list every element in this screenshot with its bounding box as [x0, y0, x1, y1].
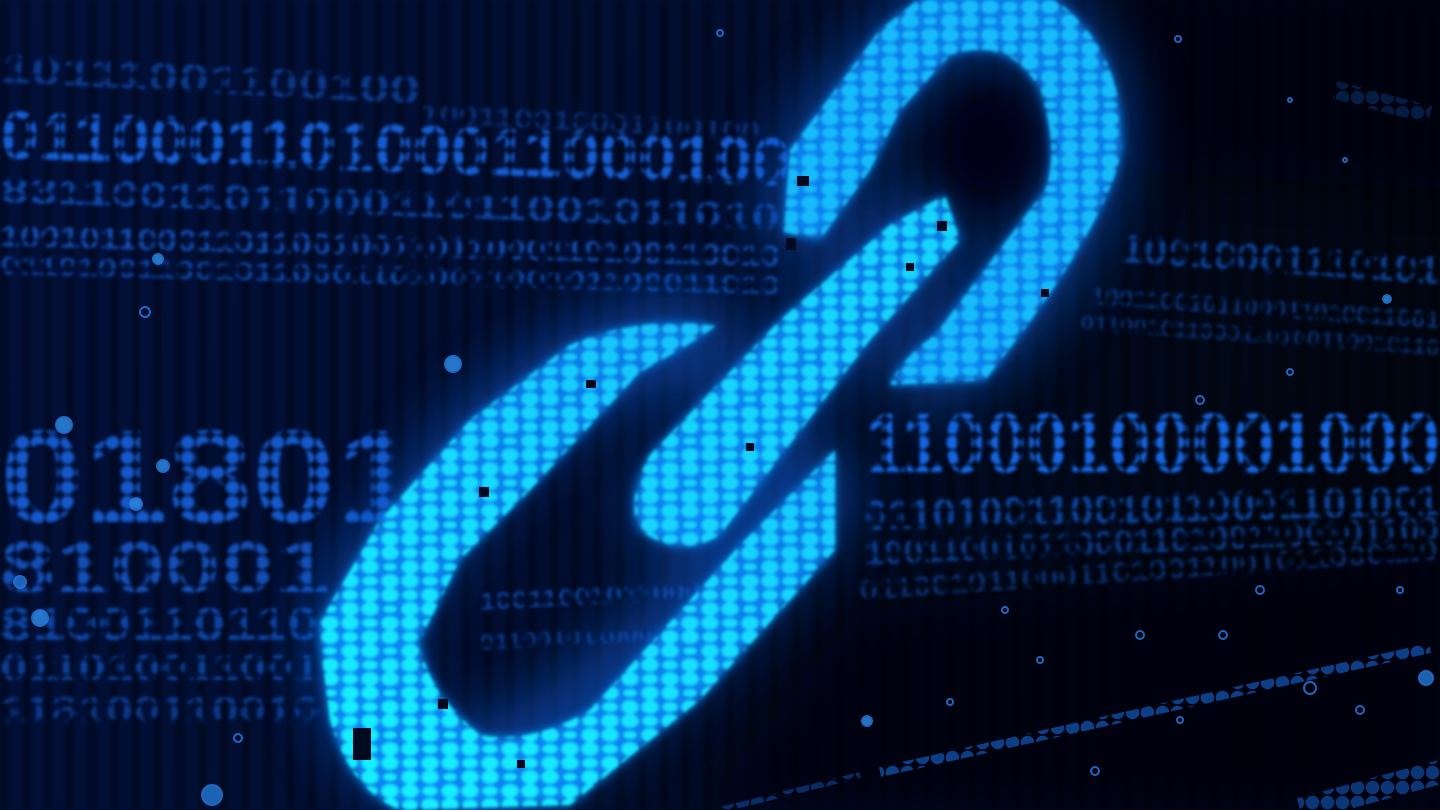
binary text: right side rows: 1001100101100011010011001: [1090, 283, 1440, 334]
binary text: right side rows: 10010001110101: [1119, 227, 1440, 293]
binary text: left side rows: [0, 47, 792, 730]
binary text: left side rows: 810001: [0, 528, 330, 608]
binary text: right side rows: 1001100101100011010: [479, 573, 780, 616]
binary text: left side rows: 011000110100011000100: [0, 97, 792, 201]
middle arm of upper link: [634, 195, 960, 546]
binary text: right side rows: 100110010110001101001100101100: [864, 510, 1440, 573]
binary text: left side rows: 118100110010: [0, 689, 320, 730]
binary text: left side rows: 01801: [0, 403, 420, 550]
binary text: left side rows: 0110100110010110001101001100101100011010: [0, 250, 780, 300]
binary text: right side rows: [479, 227, 1440, 655]
binary text: right side rows: 01100101100011010011001011000110: [858, 535, 1439, 606]
binary text: left side rows: 8311001101100011011001011010: [0, 169, 781, 237]
binary text: left side rows: 1001011000110110010011011000110100110010: [0, 220, 780, 273]
binary text: right side rows: 0110100110010110001101001: [864, 477, 1440, 539]
binary text: left side rows: 8100110110: [0, 598, 320, 650]
binary text: right side rows: 011001011000110100: [479, 616, 740, 655]
chain link: bright LED bands: [318, 0, 1122, 810]
binary text: right side rows: 011001011000110100110010110: [1080, 310, 1440, 360]
chain glow: [362, 14, 1091, 774]
binary text: left side rows: 100110010001100100: [420, 98, 761, 146]
chain link: LED base colour: [318, 0, 1122, 810]
binary text: left side rows: 10111001100100: [0, 47, 421, 113]
upper link: [784, 0, 1122, 385]
dark hole inside upper link: [938, 83, 1042, 207]
dark gaps between links: [353, 176, 1049, 768]
binary text: left side rows: 011010011001: [0, 647, 320, 688]
lower link: [318, 323, 835, 810]
data streaks lower right: [720, 90, 1440, 810]
